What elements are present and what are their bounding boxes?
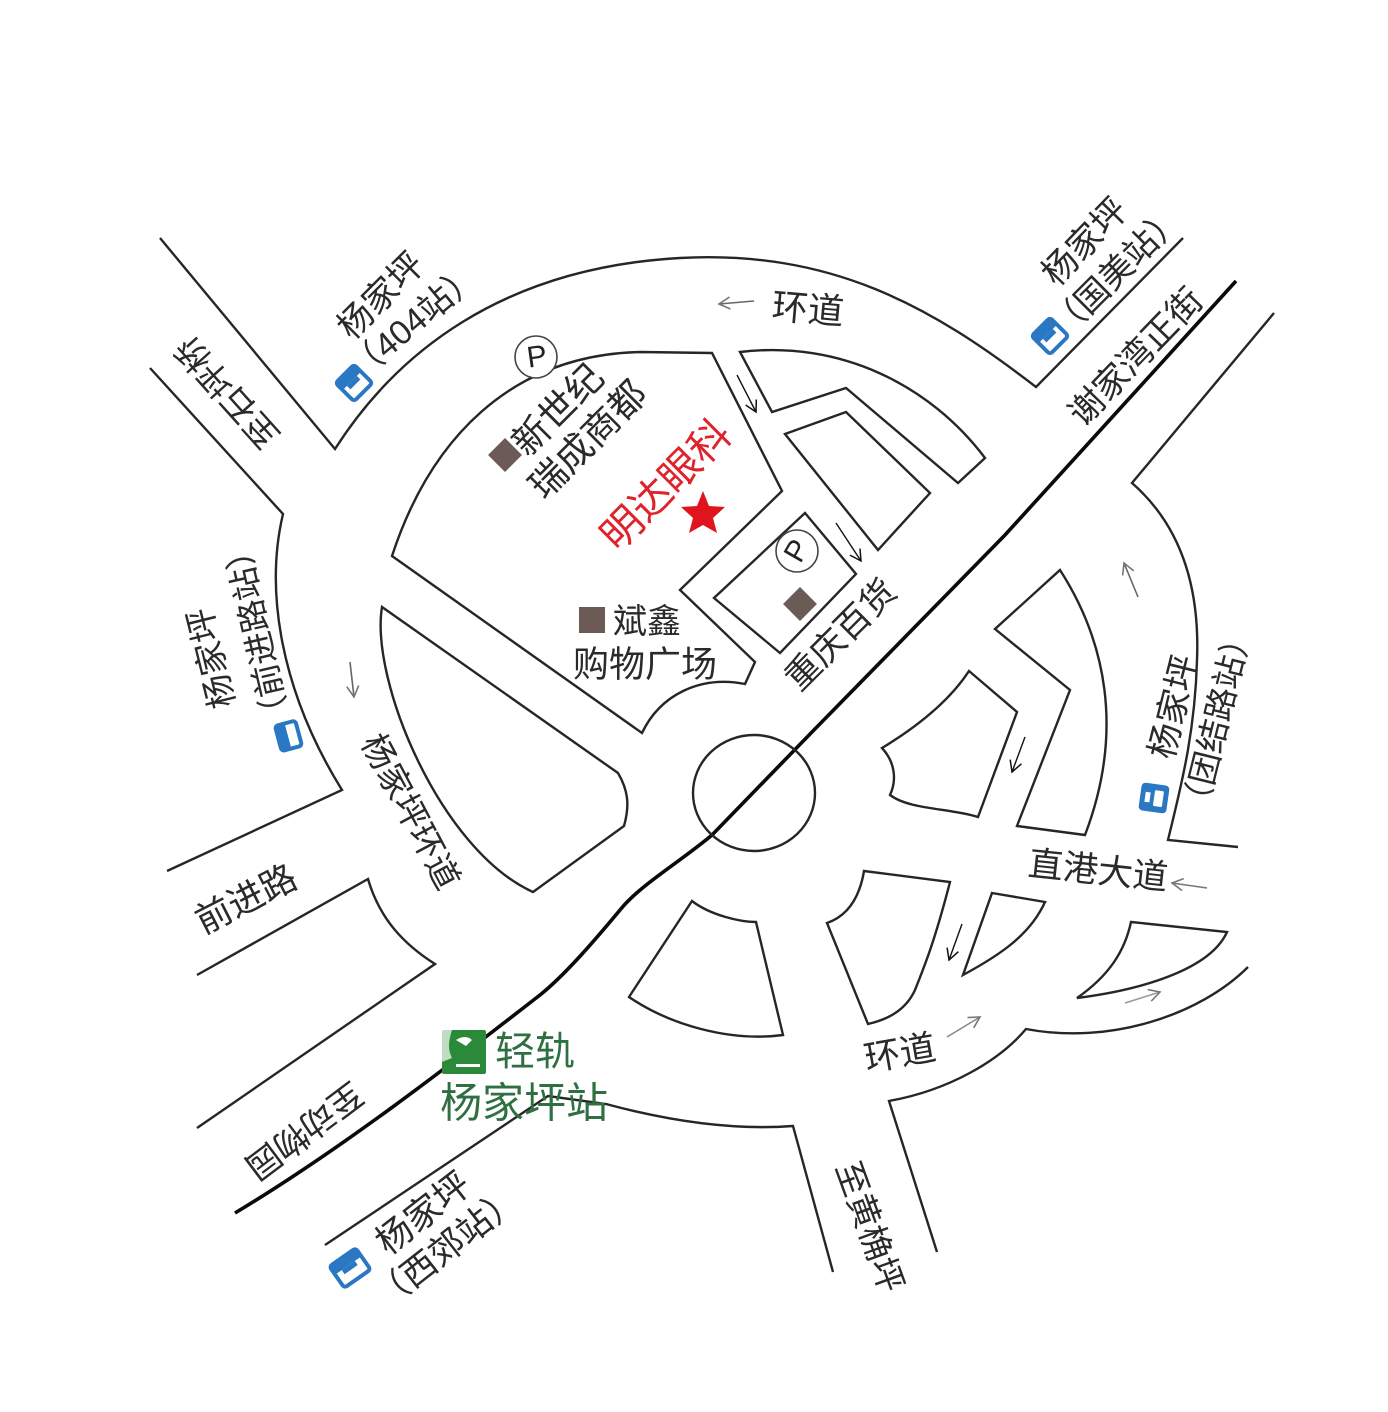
arrow	[1172, 883, 1207, 888]
label: 杨家坪 前进路站: 杨家坪	[181, 604, 243, 712]
label: 谢家湾正街: 谢家湾正街	[1061, 281, 1211, 433]
arrow	[719, 301, 754, 304]
block: north-east inner	[785, 412, 930, 550]
icon: parking north: P	[525, 339, 549, 375]
label: 斌鑫购物广场: 购物广场	[573, 644, 717, 684]
arrow	[350, 662, 354, 697]
label: 杨家坪 西郊站: （西郊站）	[366, 1179, 528, 1317]
arrows	[350, 301, 1207, 1037]
label: 杨家坪 团结路站: （团结路站）	[1175, 619, 1259, 821]
block: east pentagon	[882, 671, 1017, 817]
label: 杨家坪 团结路站: 杨家坪	[1142, 651, 1206, 763]
icon: brown diamond 新世纪	[488, 438, 522, 472]
label: 直港大道: 直港大道	[1026, 844, 1170, 898]
label: 新世纪瑞成商都: 新世纪	[504, 356, 612, 464]
arrow	[1125, 992, 1160, 1003]
icon: bus stop 团结路	[1138, 782, 1170, 814]
arrow	[949, 924, 962, 960]
icon: parking north	[515, 336, 557, 378]
label: 环道 north: 环道	[770, 285, 846, 333]
label: 至动物园: 至动物园	[238, 1074, 370, 1186]
icon: red star	[681, 491, 725, 533]
icon: bus stop 前进路	[275, 721, 302, 751]
label: 环道 south: 环道	[861, 1027, 939, 1079]
label: 斌鑫购物广场: 斌鑫	[613, 603, 681, 641]
roundabout	[693, 735, 815, 851]
block: east curved	[995, 570, 1107, 835]
block: small wedge	[963, 893, 1045, 975]
road: 前进路 south edge	[197, 879, 435, 1128]
road: south-west edge	[325, 1096, 833, 1272]
marker: 明达眼科 star and label	[592, 411, 740, 559]
road: west ring edge	[150, 368, 342, 871]
label: 杨家坪站: 杨家坪站	[440, 1080, 608, 1126]
block: north-east arc	[740, 350, 985, 483]
city blocks	[381, 350, 1227, 1037]
label: 杨家坪 404站: 杨家坪	[330, 245, 432, 347]
icon: parking south: P	[778, 534, 816, 568]
road: south-east edge	[889, 967, 1248, 1252]
label: 新世纪瑞成商都: 瑞成商都	[521, 373, 655, 507]
label: 杨家坪 国美站: （国美站）	[1043, 198, 1191, 346]
label: 斌鑫购物广场	[573, 603, 717, 684]
bus stop icons	[275, 318, 1170, 1288]
road network	[150, 238, 1274, 1272]
arrow	[1012, 737, 1025, 772]
label: 杨家坪 西郊站: 杨家坪	[368, 1164, 478, 1262]
label: 杨家坪 国美站: 杨家坪	[1034, 191, 1136, 293]
label: 明达眼科: 明达眼科	[592, 411, 740, 559]
road: north ring edge	[160, 238, 1183, 449]
label: 至黄桷坪: 至黄桷坪	[828, 1157, 910, 1297]
label: 至石坪桥: 至石坪桥	[168, 329, 288, 455]
block: 重庆百货	[714, 513, 856, 653]
landmark markers	[488, 336, 818, 633]
block: south fan	[629, 901, 783, 1037]
icon: bus stop 404	[336, 365, 372, 401]
block: west triangle	[381, 607, 627, 892]
label: 杨家坪 前进路站	[181, 531, 297, 733]
arrow	[737, 375, 756, 412]
block: 新世纪瑞成商都	[392, 352, 782, 733]
label: 杨家坪环道: 杨家坪环道	[353, 728, 467, 896]
arrow	[1124, 563, 1138, 597]
icon: light rail	[442, 1030, 486, 1074]
labels	[168, 191, 1259, 1317]
icon: brown diamond 重庆百货	[783, 587, 817, 621]
icon: bus stop 西郊	[329, 1248, 371, 1288]
icon: bus stop 国美	[1032, 318, 1068, 354]
icon: brown square 斌鑫	[579, 607, 605, 633]
label: 重庆百货: 重庆百货	[778, 572, 904, 698]
block: south-east wedge	[1077, 922, 1227, 998]
label: 前进路: 前进路	[189, 856, 303, 942]
road: east edge	[1132, 313, 1274, 847]
label: 轻轨: 轻轨	[495, 1030, 575, 1074]
arrow	[947, 1017, 980, 1037]
arrow	[836, 523, 861, 561]
label: 杨家坪 404站: （404站）	[341, 256, 487, 388]
label: 杨家坪 前进路站: （前进路站）	[217, 531, 297, 733]
light rail station	[440, 1030, 608, 1126]
road: 谢家湾正街 main road	[235, 281, 1236, 1213]
block: south-centre	[827, 871, 950, 1024]
